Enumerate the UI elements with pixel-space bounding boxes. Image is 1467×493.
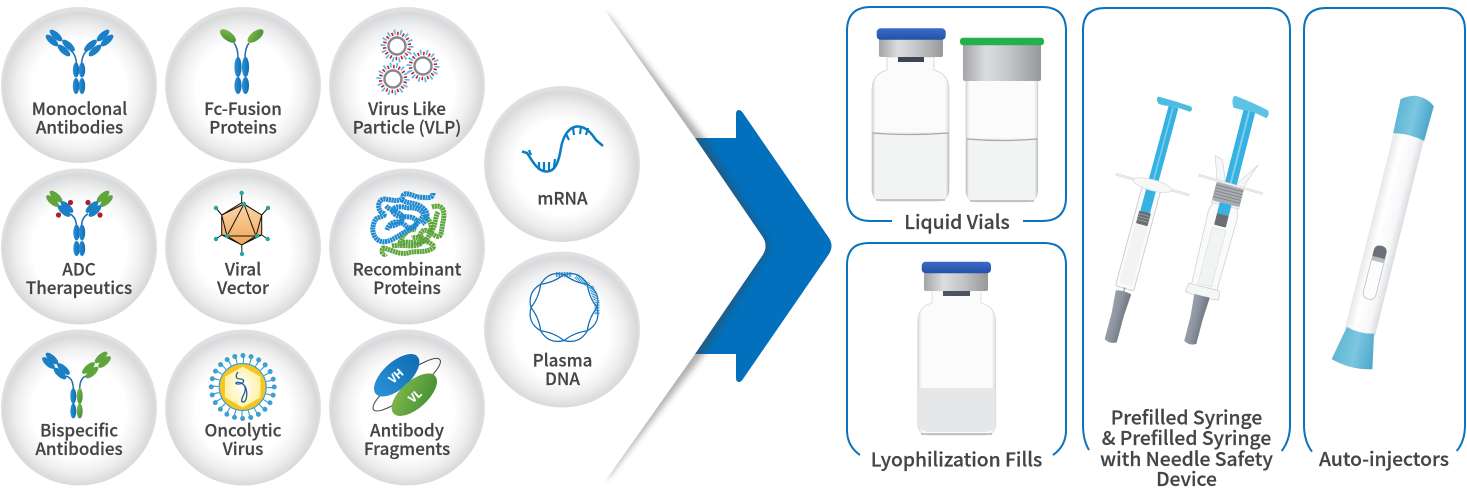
- label: viral vector: Viral: [225, 256, 261, 281]
- label: fc-fusion proteins: Fc-Fusion: [204, 95, 282, 120]
- icon: vh and vl fragments: VL: [404, 386, 425, 407]
- label: bispecific antibodies: Bispecific: [40, 417, 118, 442]
- panel: adc therapeutics: [1, 168, 157, 324]
- chevron shadow: [606, 12, 771, 480]
- label: oncolytic virus: Oncolytic: [205, 417, 281, 442]
- label: recombinant proteins: Proteins: [373, 274, 441, 299]
- icon: blue cap vial: [872, 28, 949, 201]
- icon: vh and vl fragments: VH: [384, 365, 407, 388]
- label: lyophilization fills: Lyophilization Fills: [871, 444, 1042, 472]
- label: liquid vials: Liquid Vials: [904, 207, 1010, 235]
- panel: lyophilization fills: [847, 243, 1066, 472]
- icon: antibody drug conjugate: [44, 189, 115, 256]
- icon: virus like particles: [379, 32, 437, 93]
- label: monoclonal antibodies: Antibodies: [36, 114, 123, 138]
- panel: monoclonal antibodies: [1, 7, 157, 163]
- label: recombinant proteins: Recombinant: [353, 256, 461, 281]
- panel: oncolytic virus: [165, 330, 321, 486]
- panel: recombinant proteins: [329, 168, 485, 324]
- panel: bispecific antibodies: [1, 330, 157, 486]
- label: mrna: mRNA: [537, 184, 588, 210]
- icon: circular dna: [530, 274, 598, 341]
- arrow: blue chevron: [695, 110, 832, 382]
- icon: oncolytic virus: [211, 356, 274, 418]
- panel: liquid vials: [847, 7, 1066, 235]
- label: bispecific antibodies: Antibodies: [35, 435, 123, 460]
- label: antibody fragments: Antibody: [370, 417, 444, 442]
- label: adc therapeutics: ADC: [62, 256, 96, 281]
- panel: antibody fragments: [329, 330, 485, 486]
- icon: prefilled syringe: [1073, 91, 1212, 352]
- label: antibody fragments: Fragments: [364, 435, 450, 460]
- label: prefilled syringe and needle safety device: with Needle Safety: [1100, 444, 1273, 472]
- panel: plasma dna: [484, 252, 640, 408]
- icon: monoclonal antibody: [44, 28, 115, 94]
- label: virus like particle: Particle (VLP): [353, 114, 461, 138]
- icon: fc-fusion protein: [218, 27, 266, 94]
- label: prefilled syringe and needle safety device: Prefilled Syringe: [1111, 402, 1262, 430]
- panel: virus like particle: [329, 7, 485, 163]
- white chevron panel: [480, 0, 766, 493]
- label: adc therapeutics: Therapeutics: [26, 274, 132, 299]
- label: fc-fusion proteins: Proteins: [209, 114, 277, 138]
- icon: auto-injector: [1331, 91, 1439, 372]
- panel: fc-fusion proteins: [165, 7, 321, 163]
- icon: recombinant protein tangle: [373, 193, 444, 255]
- panel: prefilled syringes: [1073, 8, 1290, 492]
- label: plasma dna: DNA: [545, 365, 580, 390]
- icon: viral vector capsid: [214, 191, 270, 256]
- label: prefilled syringe and needle safety device: Device: [1156, 464, 1217, 492]
- icon: prefilled syringe with needle safety device: [1158, 92, 1284, 352]
- label: auto-injectors: Auto-injectors: [1319, 444, 1449, 472]
- icon: lyophilized vial: [918, 262, 996, 435]
- label: plasma dna: Plasma: [533, 346, 592, 372]
- icon: mrna strand: [522, 126, 603, 172]
- panel: viral vector: [165, 168, 321, 324]
- icon: vh and vl fragments: [367, 347, 446, 423]
- icon: green cap vial: [960, 38, 1044, 202]
- icon: bispecific antibody: [40, 350, 113, 418]
- label: viral vector: Vector: [216, 274, 269, 299]
- panel: auto-injectors: [1304, 8, 1465, 472]
- panel: mrna: [484, 86, 640, 242]
- label: oncolytic virus: Virus: [222, 435, 263, 460]
- label: monoclonal antibodies: Monoclonal: [32, 95, 127, 120]
- label: virus like particle: Virus Like: [368, 95, 446, 120]
- label: prefilled syringe and needle safety device: & Prefilled Syringe: [1102, 423, 1271, 451]
